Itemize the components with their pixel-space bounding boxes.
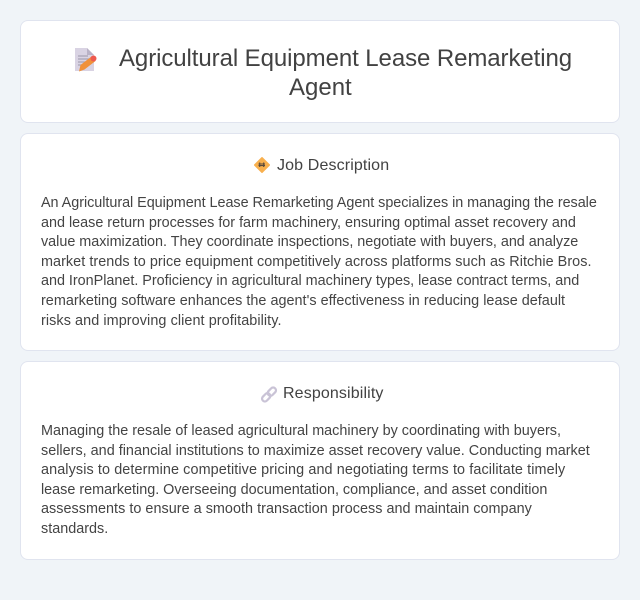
- responsibility text: sellers, and financial institutions to maximize asset recovery value. Conducting market: [41, 443, 590, 459]
- responsibility text: assessments to ensure a smooth transaction process and maintain company: [41, 501, 532, 517]
- title text: Agricultural Equipment Lease Remarketing: [119, 45, 572, 72]
- job description text: and lease return processes for farm machinery, ensuring optimal asset recovery and: [41, 215, 576, 231]
- responsibility text: Managing the resale of leased agricultural machinery by coordinating with buyers,: [41, 423, 561, 439]
- heading: responsibility: Responsibility: [283, 385, 384, 402]
- panel: responsibility: [20, 361, 620, 560]
- panel: title: [20, 20, 620, 123]
- panel: job description: [20, 133, 620, 351]
- job description text: remarketing software enhances the agent's effectiveness in reducing lease default: [41, 293, 565, 309]
- title text: Agent: [289, 74, 352, 101]
- icon: document with pencil: [75, 48, 96, 72]
- job description text: market trends to price equipment competitively across platforms such as Ritchie Bros.: [41, 254, 592, 270]
- job description text: An Agricultural Equipment Lease Remarketing Agent specializes in managing the resale: [41, 195, 597, 211]
- responsibility text: standards.: [41, 521, 108, 537]
- job description text: [41, 195, 597, 329]
- responsibility text: [41, 423, 590, 537]
- responsibility text: analysis to determine competitive pricing and negotiating terms to facilitate timely: [41, 462, 565, 478]
- title text: [119, 45, 572, 101]
- responsibility text: lease remarketing. Overseeing documentation, compliance, and asset condition: [41, 482, 547, 498]
- icon: link: [261, 386, 277, 403]
- job description text: and IronPlanet. Proficiency in agricultural machinery types, lease contract terms, and: [41, 273, 579, 289]
- job description text: value maximization. They coordinate inspections, negotiate with buyers, and analyze: [41, 234, 578, 250]
- heading: job description: Job Description: [277, 157, 389, 174]
- icon: warning diamond: [254, 157, 270, 173]
- job description text: risks and improving client profitability.: [41, 313, 282, 329]
